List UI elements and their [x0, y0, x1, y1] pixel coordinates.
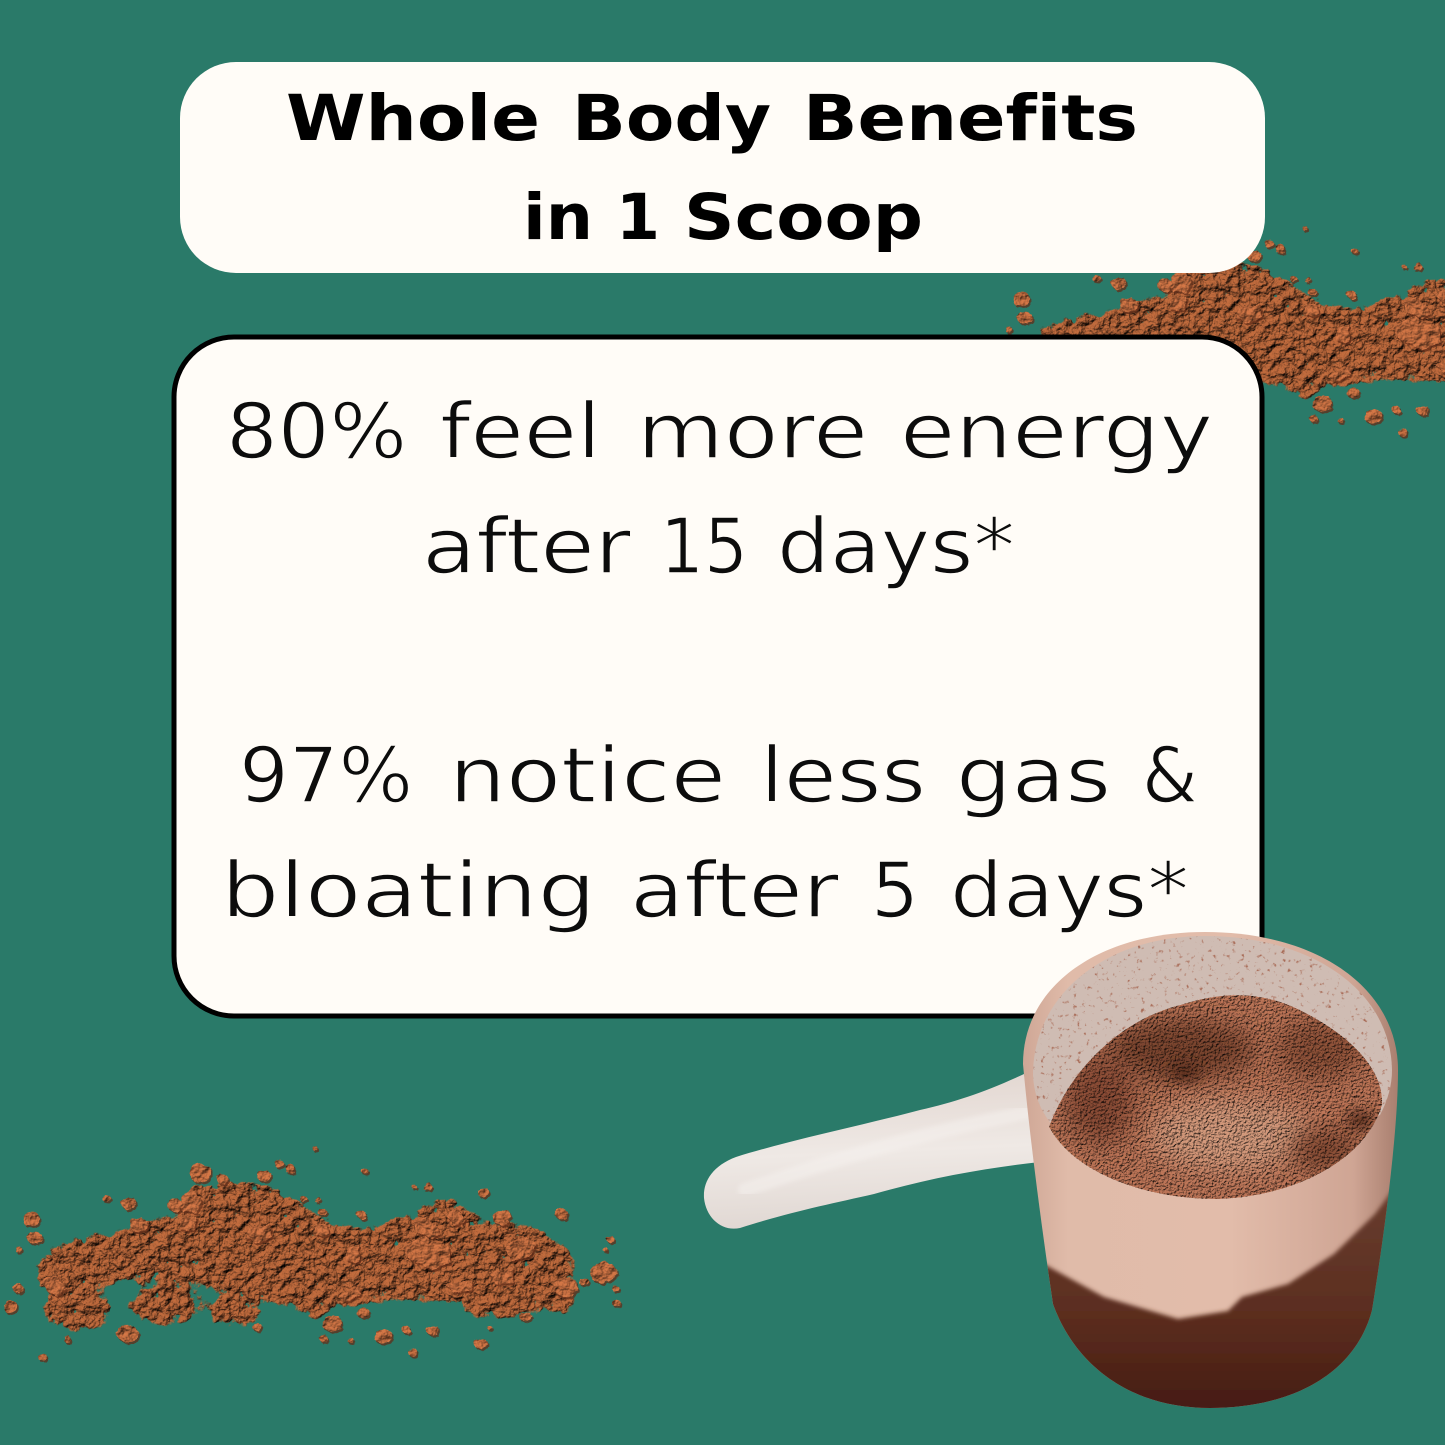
stat: gas and bloating: less — [760, 732, 926, 821]
stat: gas and bloating: 5 — [871, 847, 919, 936]
title text — [286, 82, 1138, 254]
title text: Body — [572, 82, 771, 155]
stat: gas and bloating: gas — [956, 732, 1111, 821]
stat: energy — [226, 388, 1213, 592]
title text: in — [523, 181, 593, 254]
stat: energy: after — [422, 503, 631, 592]
stat: gas and bloating: after — [630, 847, 839, 936]
stat: gas and bloating — [221, 732, 1198, 936]
powder pile: bottom left — [3, 1146, 620, 1361]
stat: energy: days* — [777, 503, 1015, 592]
stats panel — [174, 337, 1262, 1016]
title text: Scoop — [684, 181, 923, 254]
powder pile: top right — [993, 226, 1445, 441]
title text: Whole — [286, 82, 540, 155]
powder packed at the scoop bottom — [1047, 1190, 1389, 1408]
cup interior wall with dusting — [1033, 936, 1392, 1150]
title panel — [180, 62, 1265, 273]
stat: gas and bloating: bloating — [221, 847, 596, 936]
stat: energy: more — [637, 388, 868, 477]
stat: energy: feel — [440, 388, 601, 477]
scoop with powder — [704, 932, 1400, 1420]
stat: energy: 80% — [226, 388, 407, 477]
stat: energy: energy — [900, 388, 1213, 477]
stat: gas and bloating: & — [1142, 732, 1198, 821]
chocolate powder in the scoop — [1049, 995, 1382, 1199]
title text: Benefits — [803, 82, 1138, 155]
stat: gas and bloating: days* — [950, 847, 1189, 936]
cup body — [1023, 932, 1398, 1408]
stat: gas and bloating: notice — [449, 732, 726, 821]
title text: 1 — [616, 181, 660, 254]
stat: gas and bloating: 97% — [239, 732, 413, 821]
stat: energy: 15 — [660, 503, 748, 592]
scoop handle — [704, 1074, 1040, 1229]
